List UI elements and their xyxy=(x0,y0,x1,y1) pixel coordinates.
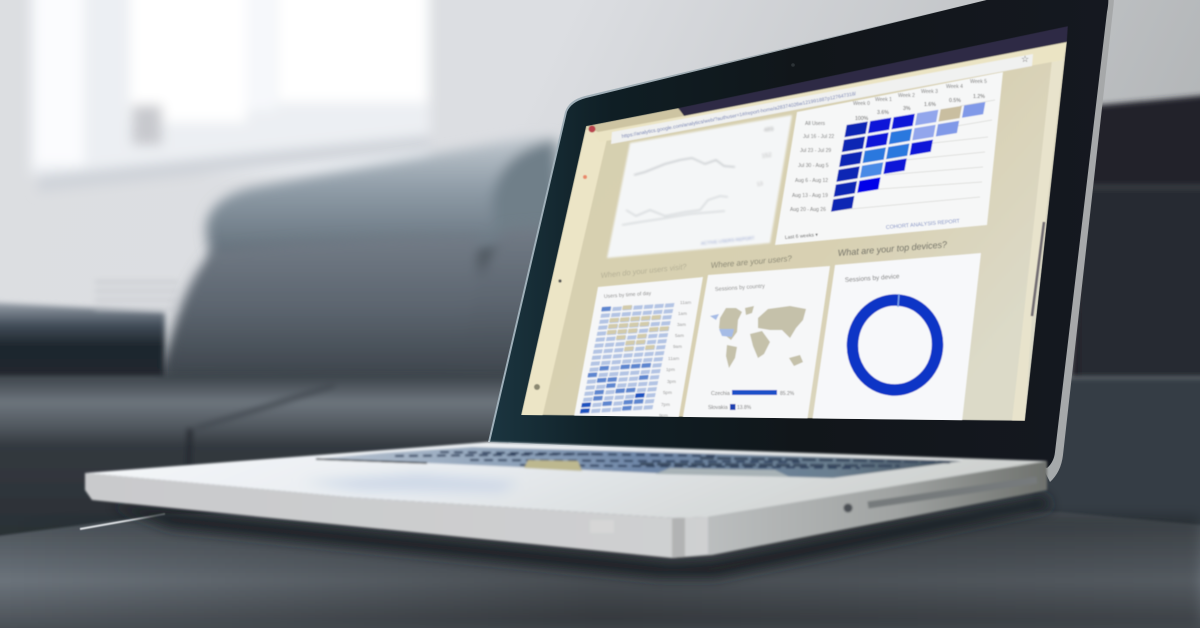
keyboard back rim xyxy=(473,446,962,460)
cohort heat grid xyxy=(831,102,985,212)
heatmap hour labels: 5pm xyxy=(663,390,672,395)
card: cohort analysis: 3.6% xyxy=(877,110,889,116)
heatmap hour labels: 9am xyxy=(673,344,682,349)
cohort week labels: Week 0 xyxy=(853,101,870,107)
section heading: where: Where are your users? xyxy=(710,254,793,270)
cohort week labels: Week 2 xyxy=(898,93,915,99)
table darkening towards the centre xyxy=(0,515,1200,628)
right gutter xyxy=(1012,58,1064,421)
line chart bottom xyxy=(622,196,728,225)
line chart top xyxy=(634,158,735,175)
laptop base xyxy=(85,442,1047,558)
side indicator xyxy=(590,520,614,533)
card: cohort analysis: COHORT ANALYSIS REPORT xyxy=(886,218,961,231)
heatmap hour labels: 3pm xyxy=(667,379,676,384)
heatmap hour labels: 9pm xyxy=(659,413,668,418)
left bench xyxy=(0,302,165,380)
map: highlighted USA xyxy=(719,329,734,337)
keyboard dark rim xyxy=(316,459,427,463)
cohort date labels: Aug 6 - Aug 12 xyxy=(795,178,828,184)
card: sessions by country: Slovakia xyxy=(708,405,728,411)
card: cohort analysis: 3% xyxy=(903,106,911,112)
palm rest reflection xyxy=(300,474,520,492)
heatmap hour labels: 3am xyxy=(677,322,686,327)
heatmap hour labels: 5am xyxy=(675,333,684,338)
card: cohort analysis: Last 6 weeks ▾ xyxy=(785,232,819,241)
card: active users: 13 xyxy=(756,181,763,188)
donut chart xyxy=(848,294,942,394)
base right side xyxy=(672,461,1047,558)
section heading: devices: What are your top devices? xyxy=(837,239,947,258)
card: cohort analysis xyxy=(775,72,1003,245)
laptop xyxy=(85,0,1114,558)
card: sessions by device: Sessions by device xyxy=(845,273,900,284)
sofa base fill xyxy=(0,232,1200,628)
laptop shadow xyxy=(110,495,1052,578)
browser address bar: https://analytics.google.com/analytics/web/?authuser=1#/report-home/a28374026w121991887p127647318/ xyxy=(621,91,857,140)
card: users by time of day: Users by time of day xyxy=(604,291,652,300)
lid silver edge xyxy=(488,0,1114,482)
card: active users: ACTIVE USERS REPORT xyxy=(701,235,755,246)
page background xyxy=(521,42,1067,421)
cohort week labels: Week 1 xyxy=(875,97,892,103)
base front face xyxy=(85,473,708,558)
cohort date labels: Aug 20 - Aug 26 xyxy=(790,207,826,213)
section heading: when: When do your users visit? xyxy=(600,262,688,280)
base top deck xyxy=(85,442,1047,518)
cohort date labels: Aug 13 - Aug 19 xyxy=(792,193,828,199)
keyboard dark right rows xyxy=(640,458,950,466)
scrollbar glint xyxy=(1032,222,1044,316)
foreground table surface xyxy=(0,512,1200,628)
cohort week labels: Week 4 xyxy=(946,84,963,90)
cohort date labels: Jul 23 - Jul 29 xyxy=(800,148,831,154)
card: cohort analysis: 100% xyxy=(855,116,869,122)
cohort row lines xyxy=(840,100,995,210)
card: cohort analysis: 1.6% xyxy=(924,102,936,108)
card: users by time of day xyxy=(573,277,703,422)
browser tab bar xyxy=(586,26,1068,132)
laptop lid xyxy=(488,0,1114,482)
card: cohort analysis: 0.5% xyxy=(949,98,961,104)
port xyxy=(844,504,852,512)
browser address bar: ☆ xyxy=(1021,54,1029,64)
cohort week labels: Week 5 xyxy=(970,79,987,85)
card: sessions by country xyxy=(682,266,830,422)
corner highlight xyxy=(672,518,685,558)
heatmap hour labels: 11am xyxy=(668,356,679,361)
card: active users: 152 xyxy=(761,152,773,160)
seat cushions xyxy=(0,376,510,551)
heatmap hour labels: 11am xyxy=(680,300,691,305)
card: sessions by device xyxy=(812,253,981,422)
keyboard glare xyxy=(655,468,790,477)
world map xyxy=(719,306,806,368)
card: cohort analysis: 1.2% xyxy=(973,94,985,100)
right seat xyxy=(1030,377,1200,526)
right sofa back xyxy=(1070,94,1200,378)
country bars: Czechia xyxy=(711,391,730,397)
card: sessions by country: 85.2% xyxy=(780,391,795,397)
cohort date labels: Jul 30 - Aug 5 xyxy=(798,163,829,169)
heatmap xyxy=(580,302,676,415)
radiator xyxy=(95,282,178,309)
card: sessions by country: Sessions by country xyxy=(715,284,765,293)
sidebar xyxy=(521,126,610,418)
map: highlighted Alaska xyxy=(710,314,719,320)
table edge highlight xyxy=(80,514,165,529)
lid bezel xyxy=(490,0,1108,468)
heatmap hour labels: 7pm xyxy=(661,402,670,407)
heatmap hour labels: 1pm xyxy=(666,367,675,372)
browser address bar xyxy=(611,54,1033,144)
card: active users: 489 xyxy=(763,126,775,134)
window xyxy=(30,0,430,192)
cohort date labels: Jul 16 - Jul 22 xyxy=(803,134,834,140)
browser toolbar xyxy=(586,42,1067,142)
keyboard keys xyxy=(395,452,860,468)
cohort week labels: Week 3 xyxy=(921,89,938,95)
sofa backrest and cushions xyxy=(206,137,560,266)
keyboard yellow reflection xyxy=(524,460,582,471)
laptop screen: analytics dashboard xyxy=(521,26,1068,422)
card: sessions by country: 13.8% xyxy=(737,405,752,411)
keyboard xyxy=(316,446,962,478)
webcam xyxy=(791,63,795,67)
heatmap hour labels: 1am xyxy=(678,311,687,316)
sd card slot xyxy=(868,480,1037,505)
cohort date labels: All Users xyxy=(805,121,826,127)
card: active users xyxy=(607,115,792,258)
